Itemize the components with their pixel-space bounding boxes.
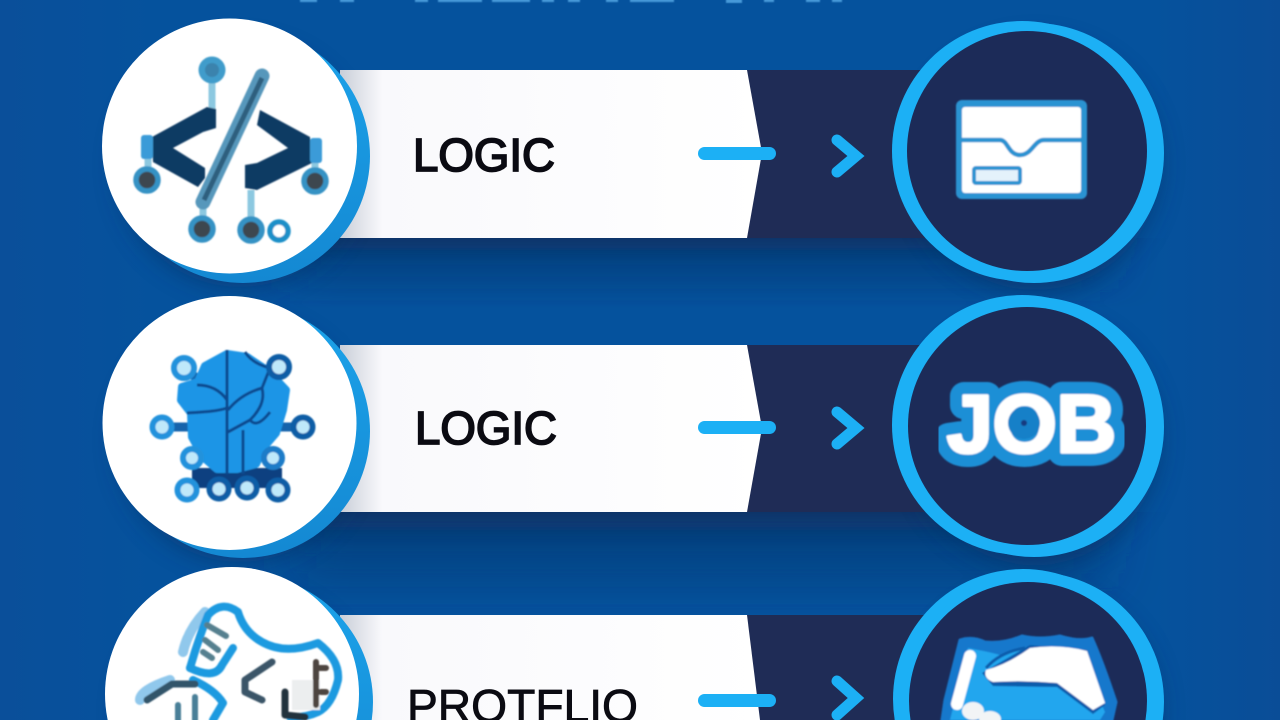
icon: JOB lettering: JOB: [947, 379, 1116, 470]
left circle: portfolio icon: [105, 567, 373, 720]
arrow: dash: [698, 421, 776, 434]
panel: row 3 white band: [340, 615, 760, 720]
left circle: code icon: [102, 18, 370, 283]
row 2: [102, 295, 1164, 558]
arrow: chevron: [837, 412, 856, 444]
icon: circuit brain: [152, 350, 312, 500]
right circle: handshake icon: [893, 569, 1164, 720]
icon: JOB lettering: JOB: [947, 379, 1116, 470]
right circle: window icon: [892, 21, 1164, 283]
arrow: chevron: [837, 140, 856, 172]
title, cropped at the top edge: [300, 0, 842, 3]
panel: row 2 white band: [340, 345, 762, 512]
label: LOGIC: LOGIC: [415, 402, 557, 454]
panel: row 2 dark band: [740, 345, 930, 512]
icon: handshake: [942, 636, 1116, 720]
icon: code brackets with circuit nodes: [136, 56, 326, 241]
row 3: [105, 567, 1164, 720]
arrow: dash: [698, 147, 776, 160]
label: LOGIC: LOGIC: [413, 129, 555, 181]
icon: card tray: [956, 100, 1087, 199]
row 1: [102, 18, 1164, 283]
arrow: dash: [698, 694, 776, 707]
panel: row 1 dark band: [740, 70, 930, 238]
panel: row 3 dark band: [740, 615, 930, 720]
icon: portfolio puzzle outlines: [140, 607, 338, 720]
right circle: JOB badge: [892, 295, 1164, 557]
arrow: chevron: [837, 681, 856, 715]
left circle: brain icon: [102, 296, 370, 558]
band shadows: [118, 40, 1160, 720]
panel: row 1 white band: [340, 70, 762, 238]
